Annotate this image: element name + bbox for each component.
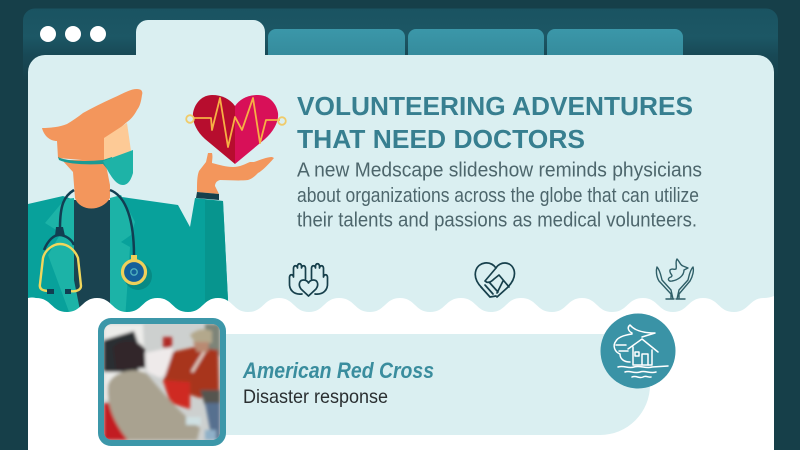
title — [297, 93, 693, 154]
title: THAT NEED DOCTORS — [297, 126, 585, 154]
description text — [297, 158, 702, 232]
face highlight — [104, 123, 131, 161]
shirt — [74, 200, 110, 320]
mask — [103, 150, 133, 185]
stethoscope earpieces — [40, 244, 81, 291]
lapel right — [110, 195, 135, 320]
description text: about organizations across the globe that can utilize — [297, 184, 699, 207]
stethoscope chest piece — [124, 262, 152, 290]
head and hair — [42, 89, 142, 162]
coat sleeve shade — [205, 200, 229, 320]
icon: hands with dove — [656, 259, 693, 299]
window control dots — [40, 26, 106, 42]
list card: American Red Cross — [98, 318, 650, 446]
inactive tabs — [268, 29, 683, 56]
white lower section with wave edge — [28, 296, 774, 450]
neck — [62, 160, 110, 208]
icon: hands holding heart — [289, 264, 328, 296]
stethoscope tube — [60, 190, 134, 256]
description text: their talents and passions as medical volunteers. — [297, 208, 697, 232]
card title: American Red Cross — [242, 358, 434, 383]
title: VOLUNTEERING ADVENTURES — [297, 93, 693, 121]
icon badge: house in flood — [600, 314, 676, 388]
icon: handshake heart — [475, 263, 515, 297]
hand — [197, 153, 274, 194]
card background — [130, 334, 650, 435]
card subtitle: Disaster response — [243, 386, 388, 408]
cuff — [196, 192, 219, 200]
doctor illustration — [28, 89, 274, 320]
heart with ECG line — [186, 95, 286, 164]
mask strap — [58, 157, 112, 175]
description text: A new Medscape slideshow reminds physicians — [297, 158, 702, 182]
card photo — [98, 318, 226, 446]
lapel left — [45, 198, 82, 320]
coat — [28, 196, 229, 320]
